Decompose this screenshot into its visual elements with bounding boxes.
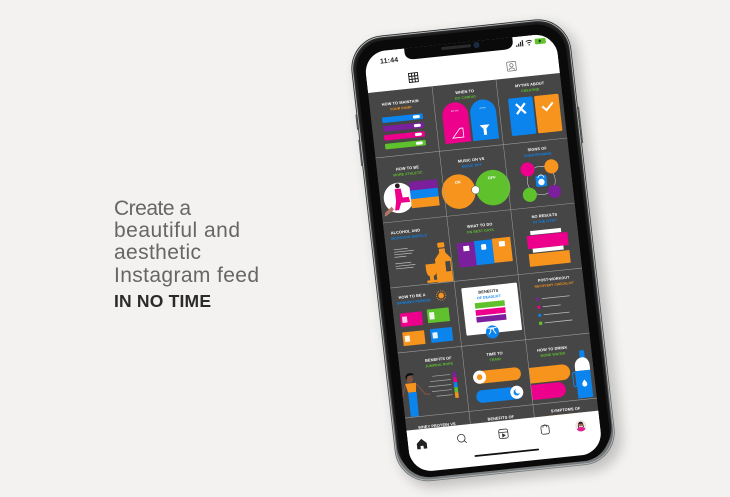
screen bbox=[363, 32, 603, 474]
orange pill bbox=[529, 364, 571, 384]
home indicator bbox=[474, 448, 539, 457]
cell: alcohol and muscle: ALCOHOL AND bbox=[390, 227, 420, 235]
body copy bbox=[394, 247, 416, 269]
cell: how to maintain your pump: YOUR PUMP bbox=[390, 105, 413, 112]
cards bbox=[400, 307, 453, 346]
feed background bbox=[368, 73, 599, 436]
cell: how to drink more water: HOW TO DRINK bbox=[537, 345, 568, 353]
phone body bbox=[348, 16, 618, 485]
icon: shop bbox=[541, 425, 550, 434]
cell: alcohol and muscle: BOOSTING MUSCLE bbox=[391, 233, 428, 241]
cell: post-workout recovery checklist bbox=[534, 275, 578, 325]
cell: music on vs music off: MUSIC ON VS bbox=[458, 156, 485, 164]
cross icon bbox=[516, 103, 526, 114]
blue arch bbox=[469, 98, 499, 141]
cell: time to train: TRAIN bbox=[489, 357, 501, 362]
phone mockup bbox=[347, 15, 625, 492]
white card bbox=[461, 283, 522, 336]
icon: search bbox=[457, 434, 467, 444]
toggle bars bbox=[382, 113, 426, 150]
cell: benefits of jumping rope bbox=[398, 355, 460, 418]
orange fact card bbox=[534, 94, 563, 133]
cell: myths about creatine: MYTHS ABOUT bbox=[515, 80, 545, 88]
notch bbox=[404, 36, 514, 60]
athlete illustration bbox=[384, 182, 412, 216]
cell: how to maintain your pump: HOW TO MAINTAIN bbox=[381, 98, 419, 107]
cell: post-workout recovery checklist: POST-WORKOUT bbox=[538, 275, 570, 283]
cell: how to be a morning person bbox=[396, 290, 453, 346]
cell: myths about creatine bbox=[506, 79, 563, 136]
cell: symptoms of: SYMPTOMS OF bbox=[551, 405, 581, 414]
cell: what to do on rest days: WHAT TO DO bbox=[467, 221, 493, 229]
sun icon bbox=[436, 290, 446, 301]
cell: how to drink more water: MORE WATER bbox=[540, 351, 566, 358]
avatar bbox=[575, 420, 587, 432]
cell: how to be more athletic bbox=[384, 166, 440, 216]
cell: benefits of jumping rope: JUMPING ROPE bbox=[425, 362, 454, 369]
cell: music on vs music off: MUSIC OFF bbox=[462, 163, 483, 169]
cell: how to be a morning person: MORNING PERSON bbox=[397, 298, 431, 306]
blue myth card bbox=[508, 96, 536, 136]
icon: home bbox=[416, 438, 427, 449]
option bars bbox=[409, 179, 440, 208]
nav icons bbox=[416, 420, 587, 449]
bottle and glass icon bbox=[423, 242, 453, 284]
sun badge bbox=[472, 370, 487, 384]
cell: myths about creatine: CREATINE bbox=[521, 87, 540, 93]
cell: when to do cardio: BEFORE bbox=[451, 110, 460, 113]
headline text: beautiful and bbox=[114, 219, 240, 242]
water bottle bbox=[570, 350, 593, 399]
cell: benefits of: BENEFITS OF bbox=[487, 414, 515, 422]
cell: music on vs music off: ON bbox=[454, 179, 461, 185]
cell: how to drink more water bbox=[527, 343, 593, 403]
cell: alcohol and muscle bbox=[391, 228, 454, 284]
cell: whey protein vs: WHEY PROTEIN VS bbox=[418, 421, 456, 430]
cell: signs of overtraining bbox=[520, 146, 561, 202]
cell: time to train bbox=[470, 349, 524, 404]
cell: benefits of deadlift: BENEFITS bbox=[478, 288, 499, 295]
grid tab icon bbox=[408, 73, 418, 83]
icon: reels bbox=[498, 429, 508, 439]
stacked bar bbox=[452, 371, 459, 398]
cell: how to maintain your pump bbox=[380, 98, 426, 150]
cell: when to do cardio bbox=[440, 86, 499, 144]
cell: how to be a morning person: HOW TO BE A bbox=[398, 292, 426, 300]
orange pill bbox=[472, 367, 522, 384]
cycle ring bbox=[527, 166, 556, 195]
headline text bbox=[114, 197, 259, 311]
tagged tab icon bbox=[507, 61, 516, 71]
headline text: Create a bbox=[114, 197, 191, 220]
cell: benefits of deadlift: OF DEADLIFT bbox=[477, 294, 502, 300]
moon badge bbox=[510, 385, 524, 399]
cell: what to do on rest days: ON REST DAYS bbox=[467, 228, 495, 235]
cell: how to be more athletic: HOW TO BE bbox=[396, 164, 419, 172]
check icon bbox=[542, 102, 554, 110]
versus icon bbox=[471, 185, 480, 194]
lift icon bbox=[485, 325, 500, 339]
clock: 11:44 bbox=[380, 57, 399, 66]
green circle bbox=[476, 170, 510, 206]
cell: no results in the gym: NO RESULTS bbox=[531, 212, 558, 219]
jumping person bbox=[400, 371, 433, 418]
kettlebell icon bbox=[535, 174, 547, 187]
grid lines bbox=[368, 73, 599, 436]
cell: post-workout recovery checklist: RECOVERY CHECKLIST bbox=[534, 281, 574, 289]
cell: symptoms of bbox=[546, 405, 585, 418]
side buttons bbox=[355, 92, 583, 166]
orange circle bbox=[442, 174, 476, 209]
weight icon bbox=[480, 124, 490, 135]
status icons bbox=[516, 38, 546, 47]
sign circles bbox=[519, 159, 562, 203]
headline text: IN NO TIME bbox=[114, 291, 211, 311]
cell: how to be more athletic: MORE ATHLETIC bbox=[393, 170, 423, 178]
checklist bbox=[536, 294, 573, 325]
cell: benefits of jumping rope: BENEFITS OF bbox=[425, 355, 452, 363]
cell: time to train: TIME TO bbox=[486, 350, 503, 357]
answer strips bbox=[526, 227, 571, 267]
cell: no results in the gym: IN THE GYM? bbox=[533, 218, 557, 225]
cell: music on vs music off bbox=[442, 157, 510, 209]
cell: signs of overtraining: OVERTRAINING bbox=[524, 151, 552, 158]
status and tab bar bbox=[363, 33, 560, 94]
benefit bars bbox=[475, 300, 507, 323]
cell: when to do cardio: DO CARDIO bbox=[455, 95, 476, 101]
cell: when to do cardio: AFTER bbox=[479, 106, 487, 110]
blue pill bbox=[476, 386, 524, 403]
cell: benefits of deadlift bbox=[461, 283, 523, 341]
cell: when to do cardio: WHEN TO bbox=[455, 88, 474, 95]
cell: benefits of bbox=[481, 413, 521, 426]
pink pill bbox=[531, 382, 567, 400]
phone shadow bbox=[352, 20, 625, 491]
cell: music on vs music off: OFF bbox=[487, 175, 497, 180]
panels bbox=[457, 237, 513, 268]
headline text: aesthetic bbox=[114, 241, 201, 264]
bottom navigation bbox=[406, 411, 603, 474]
cell: what to do on rest days bbox=[455, 220, 513, 268]
cell: no results in the gym bbox=[524, 211, 571, 267]
benefit lines bbox=[427, 374, 453, 397]
cardio icon bbox=[452, 128, 464, 138]
pink arch bbox=[441, 101, 471, 144]
headline text: Instagram feed bbox=[114, 264, 259, 287]
cell: signs of overtraining: SIGNS OF bbox=[527, 145, 548, 152]
